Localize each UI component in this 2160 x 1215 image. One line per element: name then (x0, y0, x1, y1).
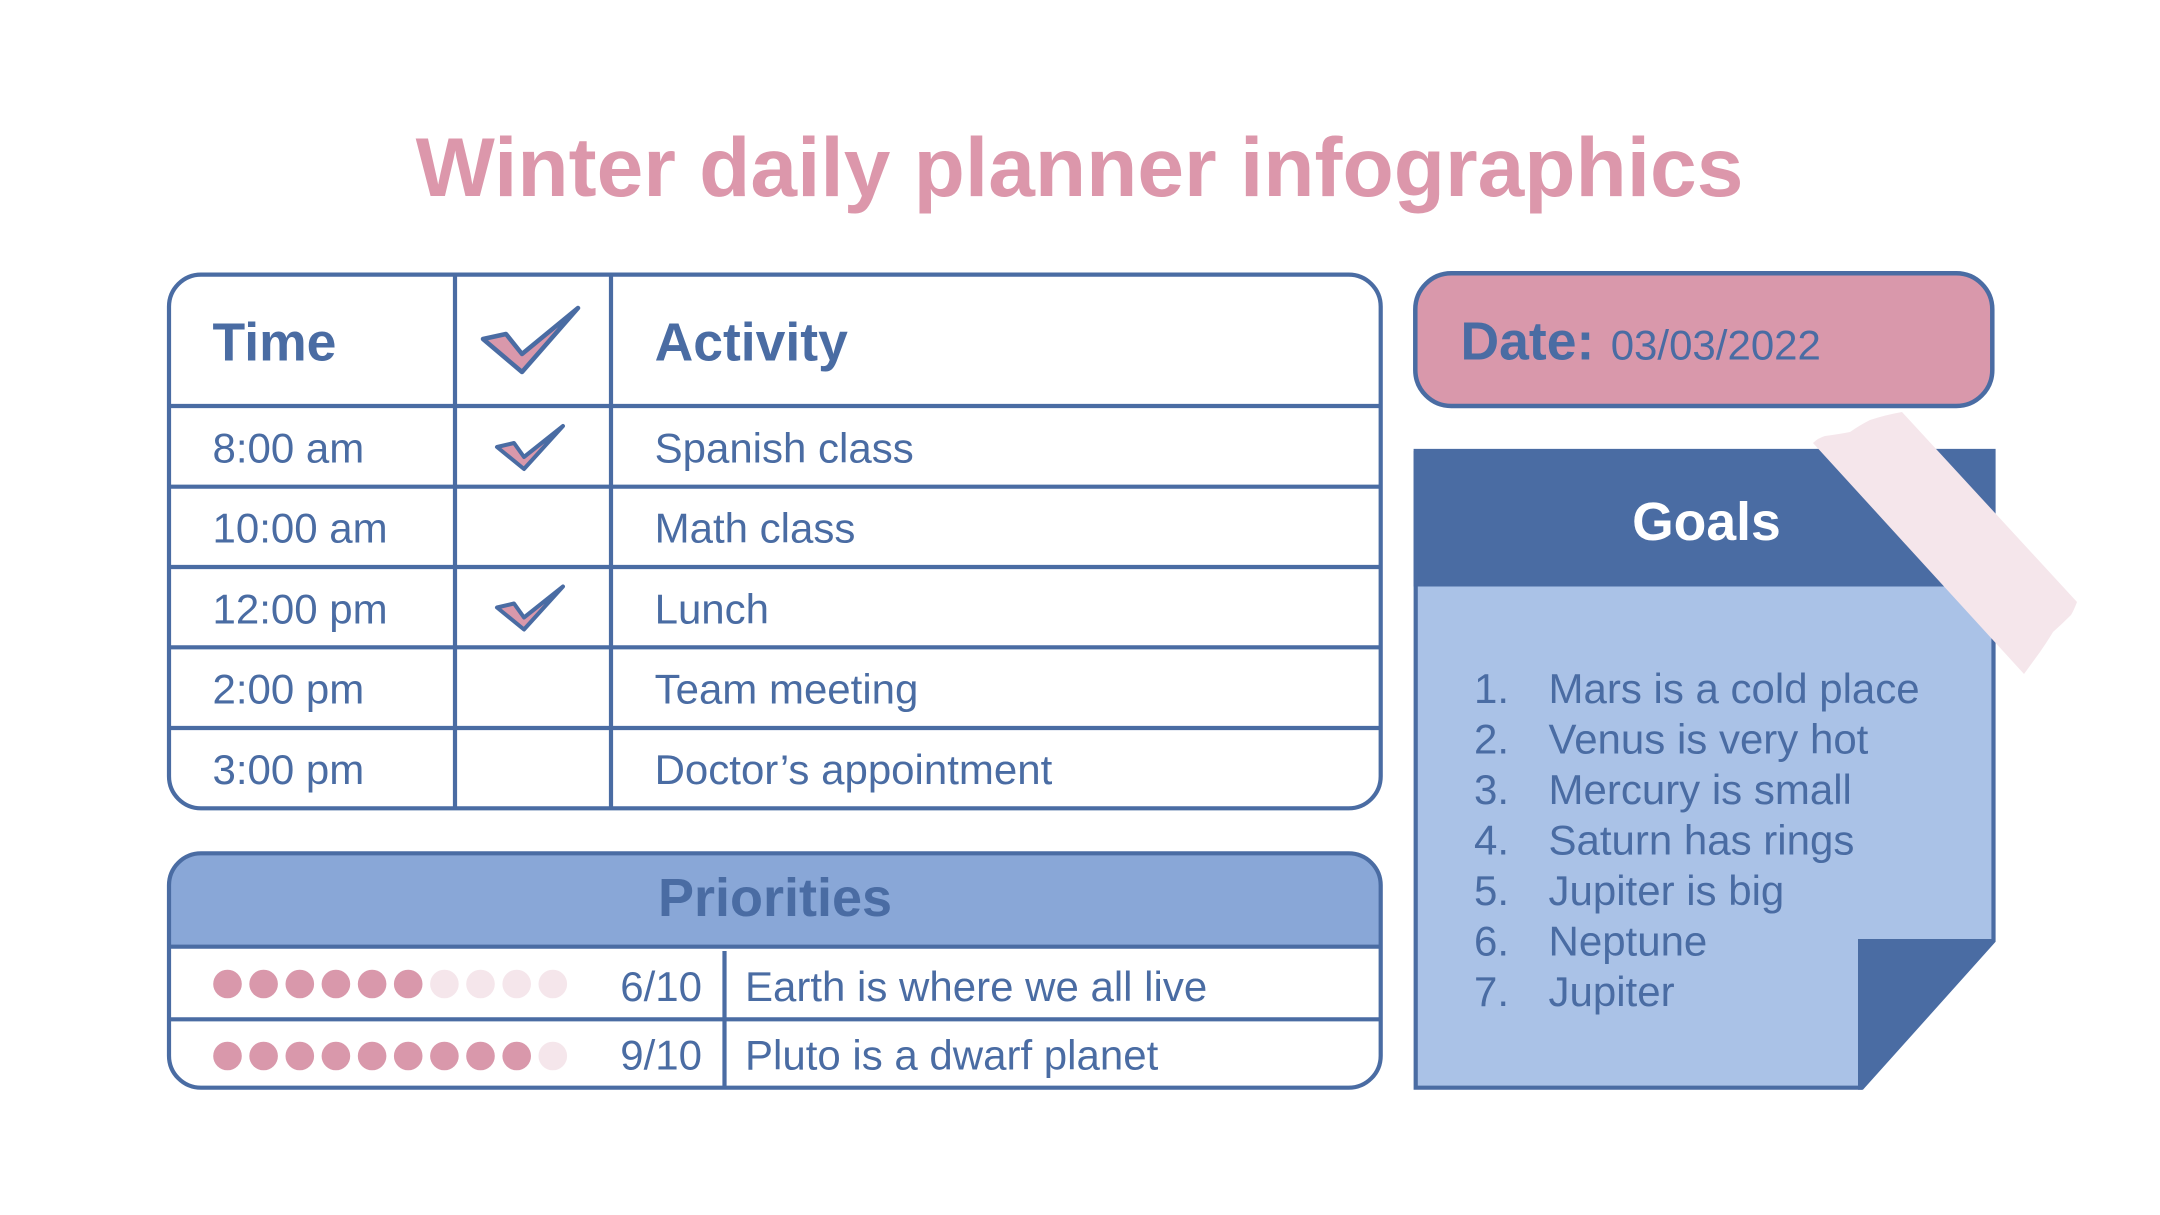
goals heading: Goals (1632, 493, 1781, 552)
goals list: Neptune (1548, 918, 1707, 964)
goals list (1474, 665, 1920, 1015)
rating value: 6/10: 6/10 (620, 963, 702, 1010)
row: 3:00 pm: Doctor’s appointment (655, 746, 1053, 793)
icon: header check mark (483, 308, 578, 372)
row: 3:00 pm (212, 746, 1053, 793)
row: 10:00 am (212, 505, 855, 552)
panel: goals note (1414, 412, 2077, 1090)
row: 3:00 pm: 3:00 pm (212, 746, 364, 793)
panel: date (1415, 273, 1992, 406)
goals list: 4. (1474, 816, 1509, 864)
row: 12:00 pm: 12:00 pm (212, 586, 388, 632)
tape strip (1813, 412, 2077, 674)
note header band (1414, 451, 1995, 586)
goals list: 1. (1474, 665, 1509, 712)
goals list: 7. (1474, 968, 1509, 1015)
table header: activity: Activity (655, 314, 848, 373)
priority: Pluto: Pluto is a dwarf planet (745, 1032, 1159, 1078)
row: 8:00 am: Spanish class (655, 425, 914, 472)
row: 2:00 pm: 2:00 pm (212, 665, 364, 712)
table frame (169, 275, 1381, 808)
row: 12:00 pm: Lunch (655, 586, 769, 632)
goals list: Mercury is small (1548, 766, 1852, 813)
panel: priorities (169, 853, 1381, 1088)
rating dots: 6 of 10 (213, 970, 567, 998)
date label: Date: (1460, 312, 1594, 371)
title: Winter daily planner infographics (416, 120, 1743, 214)
row: 8:00 am: 8:00 am (212, 425, 364, 472)
table header: time: Time (212, 314, 336, 373)
goals list: Venus is very hot (1548, 716, 1869, 762)
goals list: 2. (1474, 716, 1509, 762)
priorities header band (169, 853, 1381, 947)
goals list: Jupiter (1548, 968, 1675, 1015)
goals list: Mars is a cold place (1548, 665, 1920, 712)
row: 2:00 pm: Team meeting (655, 665, 918, 712)
panel: schedule table (169, 275, 1381, 808)
priority: Earth: Earth is where we all live (745, 963, 1207, 1010)
date value: 03/03/2022 (1611, 321, 1821, 368)
row: 10:00 am: 10:00 am (212, 505, 388, 552)
note body (1416, 451, 1994, 1088)
row: 10:00 am: Math class (655, 505, 855, 552)
row: 12:00 pm (212, 586, 769, 632)
goals list: 5. (1474, 867, 1509, 914)
row: 8:00 am (212, 425, 914, 472)
goals list: 3. (1474, 766, 1509, 813)
rating value: 9/10: 9/10 (620, 1032, 702, 1078)
folded corner (1858, 939, 1995, 1090)
priorities frame (169, 853, 1381, 1088)
goals list: Jupiter is big (1548, 867, 1784, 914)
row: 2:00 pm (212, 665, 918, 712)
rating dots: 9 of 10 (213, 1042, 567, 1070)
goals list: 6. (1474, 918, 1509, 964)
date box (1415, 273, 1992, 406)
goals list: Saturn has rings (1548, 816, 1854, 864)
priorities heading: Priorities (658, 868, 892, 928)
